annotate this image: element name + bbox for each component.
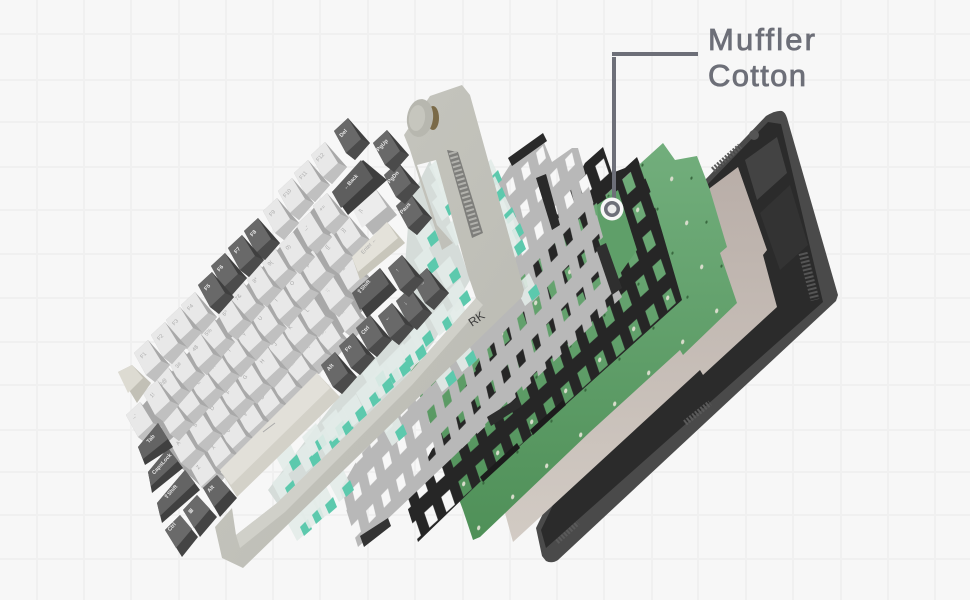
keycaps: function row dark: F6 — [216, 264, 225, 273]
keycaps: top letter row: {[ — [324, 244, 331, 251]
keycaps: home row — [169, 255, 372, 470]
keycaps: function row light: F2 — [156, 333, 165, 342]
callout: label Muffler Cotton: Muffler — [708, 22, 815, 57]
keycaps: home row: H — [259, 358, 266, 365]
keycaps: function row light: F4 — [186, 303, 195, 312]
keycaps: function row light: F1 — [139, 351, 148, 360]
keycaps: right navigation column: PgUp — [376, 138, 390, 153]
keycaps: left modifiers: ⊞ — [187, 507, 195, 515]
keycaps: number row — [126, 193, 349, 444]
keycaps: bottom letter row: V — [242, 411, 249, 418]
keycaps: bottom letter row: X — [210, 444, 217, 451]
keycaps: bottom letter row: >. — [320, 329, 328, 336]
callout: target marker — [600, 198, 624, 220]
keycaps: top letter row: W — [179, 394, 187, 403]
keycaps: top letter row: Q — [164, 411, 172, 418]
keycaps: arrows and right modifiers: → — [419, 280, 427, 288]
callout: label Muffler Cotton: Cotton — [708, 58, 806, 93]
keycaps: top letter row: R — [210, 363, 217, 370]
keycaps: bottom letter row: ?/ — [339, 309, 347, 316]
keycaps: arrows and right modifiers: ↑ — [395, 267, 401, 274]
keycaps: top letter row: O — [289, 280, 297, 287]
keycaps: top letter row: I — [274, 298, 280, 303]
keycaps: function row light — [134, 142, 347, 382]
keycaps: arrows and right modifiers: ↓ — [403, 300, 409, 307]
keycaps: number row: _- — [301, 224, 310, 232]
keycaps: home row: S — [192, 422, 199, 429]
keycaps: bottom letter row: N — [275, 377, 282, 384]
frame logo: RK — [466, 308, 487, 329]
keycaps: top letter row: U — [257, 315, 264, 322]
keycap: backslash — [353, 188, 397, 235]
keycaps: top letter row: Y — [241, 331, 248, 338]
beige plate — [505, 167, 777, 542]
keycaps: home row: A — [175, 440, 182, 447]
keycaps: home row: "' — [343, 268, 349, 274]
keycaps: bottom letter row: C — [225, 427, 232, 434]
keycaps: number row: 3# — [174, 361, 184, 370]
keycaps: function row light: F11 — [298, 170, 309, 181]
keycaps: home row: J — [273, 341, 279, 348]
keycaps: left modifiers: CapsLock — [151, 452, 174, 476]
keycaps: function row light: F12 — [315, 152, 326, 163]
panel: exploded keyboard — [118, 85, 838, 568]
keycaps: arrows and right modifiers: ← — [384, 315, 392, 323]
keycaps: function row light: F9 — [268, 209, 277, 218]
keycaps: left modifiers: Tab — [146, 433, 157, 445]
green PCB — [410, 143, 737, 540]
key block shadow — [130, 195, 372, 490]
keycaps: home row: D — [209, 405, 216, 412]
keycaps: arrows and right modifiers: ⇧Shift — [356, 278, 372, 296]
keycaps: function row dark: F7 — [233, 246, 242, 255]
keycaps: arrows and right modifiers: Fn — [344, 344, 354, 353]
keycap: backslash: |\ — [358, 208, 365, 214]
keycaps: number row: ~` — [132, 414, 140, 422]
keycaps: right navigation column: Paus — [399, 202, 412, 216]
teal switches — [268, 153, 540, 541]
callout: label Muffler Cotton — [708, 22, 815, 93]
volume knob — [404, 97, 439, 139]
keycaps: top letter row — [158, 215, 370, 441]
keycaps: number row: 0) — [285, 244, 293, 251]
keycap: backspace — [332, 160, 387, 215]
keycaps: function row light: F10 — [282, 188, 293, 199]
keycaps: function row dark — [198, 218, 280, 314]
keycaps: bottom letter row: M — [289, 360, 297, 367]
keycaps: home row: :; — [324, 287, 331, 294]
keycaps: number row: 2@ — [159, 377, 169, 388]
keycaps: number row: 8* — [252, 276, 260, 285]
keycaps: home row: K — [287, 324, 294, 331]
keycap: backspace: ←Back — [343, 173, 360, 191]
keycaps: number row: 1! — [149, 392, 157, 399]
keycaps: right navigation column: PgDn — [387, 170, 401, 185]
keycaps: arrows and right modifiers — [321, 255, 449, 394]
keycap: enter: Enter ← — [360, 237, 378, 256]
key: Esc — [118, 365, 151, 403]
keycaps: right navigation column — [334, 118, 432, 235]
keycaps: bottom letter row: Z — [195, 464, 203, 471]
keycaps: bottom letter row: <, — [304, 344, 312, 351]
keycaps: left modifiers: Alt — [207, 484, 216, 494]
keycaps: top letter row: P — [305, 262, 312, 269]
keycaps: right navigation column: Del — [339, 128, 349, 139]
keycaps: function row dark: F5 — [203, 283, 212, 292]
keycaps: number row: 6^ — [222, 309, 230, 318]
callout: leader line — [612, 52, 698, 200]
black foam frame — [405, 147, 682, 542]
keycaps: home row: G — [242, 374, 249, 381]
keycaps: number row: 5% — [204, 328, 214, 338]
keycaps: left modifiers — [138, 423, 237, 557]
gray front frame — [215, 85, 524, 568]
keycaps: bottom letter row: B — [259, 394, 266, 401]
space bar — [220, 373, 340, 497]
keycap: enter — [352, 222, 405, 280]
keycaps: number row: 9( — [267, 260, 275, 267]
silver steel plate — [340, 133, 622, 547]
keycaps: function row dark: F8 — [249, 229, 258, 238]
keycaps: number row: += — [318, 204, 327, 213]
keycaps: top letter row: E — [195, 379, 202, 386]
keycaps: number row: 7& — [234, 293, 243, 302]
keycaps: top letter row: }] — [340, 227, 347, 234]
keycaps: arrows and right modifiers: Alt — [326, 363, 336, 372]
keycaps: left modifiers: Ctrl — [167, 521, 178, 533]
keycaps: home row: F — [225, 389, 233, 396]
keycaps: top letter row: T — [226, 347, 234, 354]
keycaps: number row: 4$ — [191, 344, 200, 353]
keycaps: bottom letter row — [189, 297, 369, 494]
keycaps: function row light: F3 — [171, 318, 180, 327]
keycaps: home row: L — [304, 308, 311, 314]
case bottom shell — [536, 111, 838, 562]
keycaps: left modifiers: ⇧Shift — [163, 483, 179, 501]
keycaps: arrows and right modifiers: Ctrl — [360, 325, 371, 336]
